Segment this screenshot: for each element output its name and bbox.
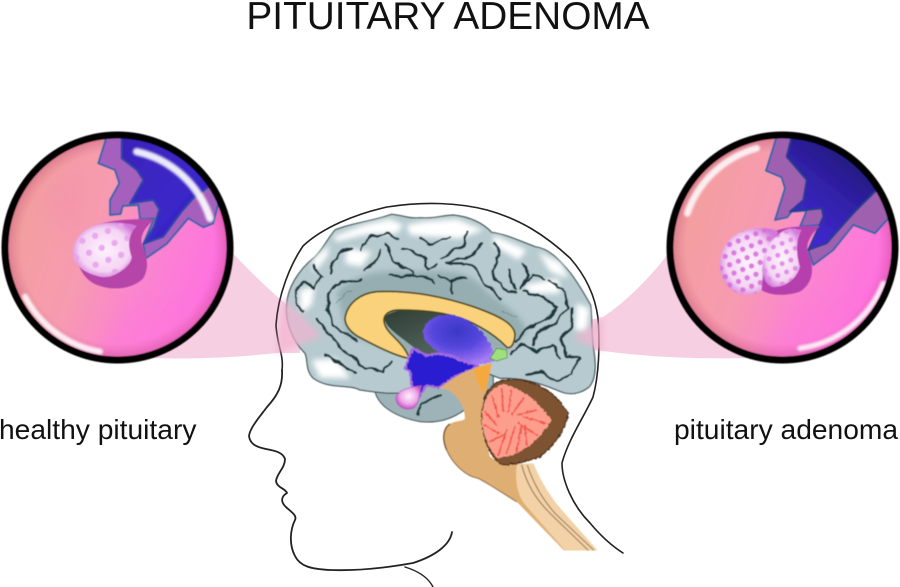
gland body (73, 223, 137, 277)
quadrigeminal plate (474, 363, 492, 395)
brain stem (439, 368, 597, 550)
sulci (297, 232, 580, 415)
gland crescent (757, 226, 820, 295)
thalamus (423, 314, 494, 364)
glare highlights (25, 152, 210, 352)
gland crescent (77, 219, 154, 289)
glare highlights (687, 148, 883, 348)
pituitary gland (396, 386, 422, 409)
label: pituitary adenoma: pituitary adenoma (674, 413, 898, 445)
head outline (249, 203, 623, 587)
lens: pituitary adenoma (665, 130, 900, 380)
cerebrum base (286, 214, 595, 394)
pineal body (490, 348, 507, 361)
corpus callosum (345, 291, 515, 358)
gyri highlights (300, 219, 589, 378)
magnifier beam: left (150, 245, 300, 358)
brain stem shading (516, 463, 597, 550)
stalk sheath (98, 133, 220, 258)
temporal underside (375, 362, 493, 422)
lens: healthy pituitary (0, 130, 235, 380)
gland front lobe (762, 228, 802, 287)
inner cortex shading (337, 271, 527, 355)
beam overlay on brain: left (276, 297, 322, 354)
label: healthy pituitary: healthy pituitary (0, 413, 197, 445)
gland back lobe (720, 228, 778, 295)
beam overlay on brain: right (572, 318, 603, 352)
cerebellum (482, 379, 568, 465)
cavity (385, 310, 490, 358)
hypothalamus (405, 348, 478, 398)
lens ring (5, 135, 230, 360)
brain (286, 214, 597, 550)
stalk inner duct (122, 133, 213, 244)
brain stem outlines (444, 424, 594, 550)
lens ring (670, 135, 895, 360)
stalk sheath (764, 138, 889, 266)
magnifier beam: right (590, 245, 750, 358)
stalk inner duct (785, 138, 877, 252)
